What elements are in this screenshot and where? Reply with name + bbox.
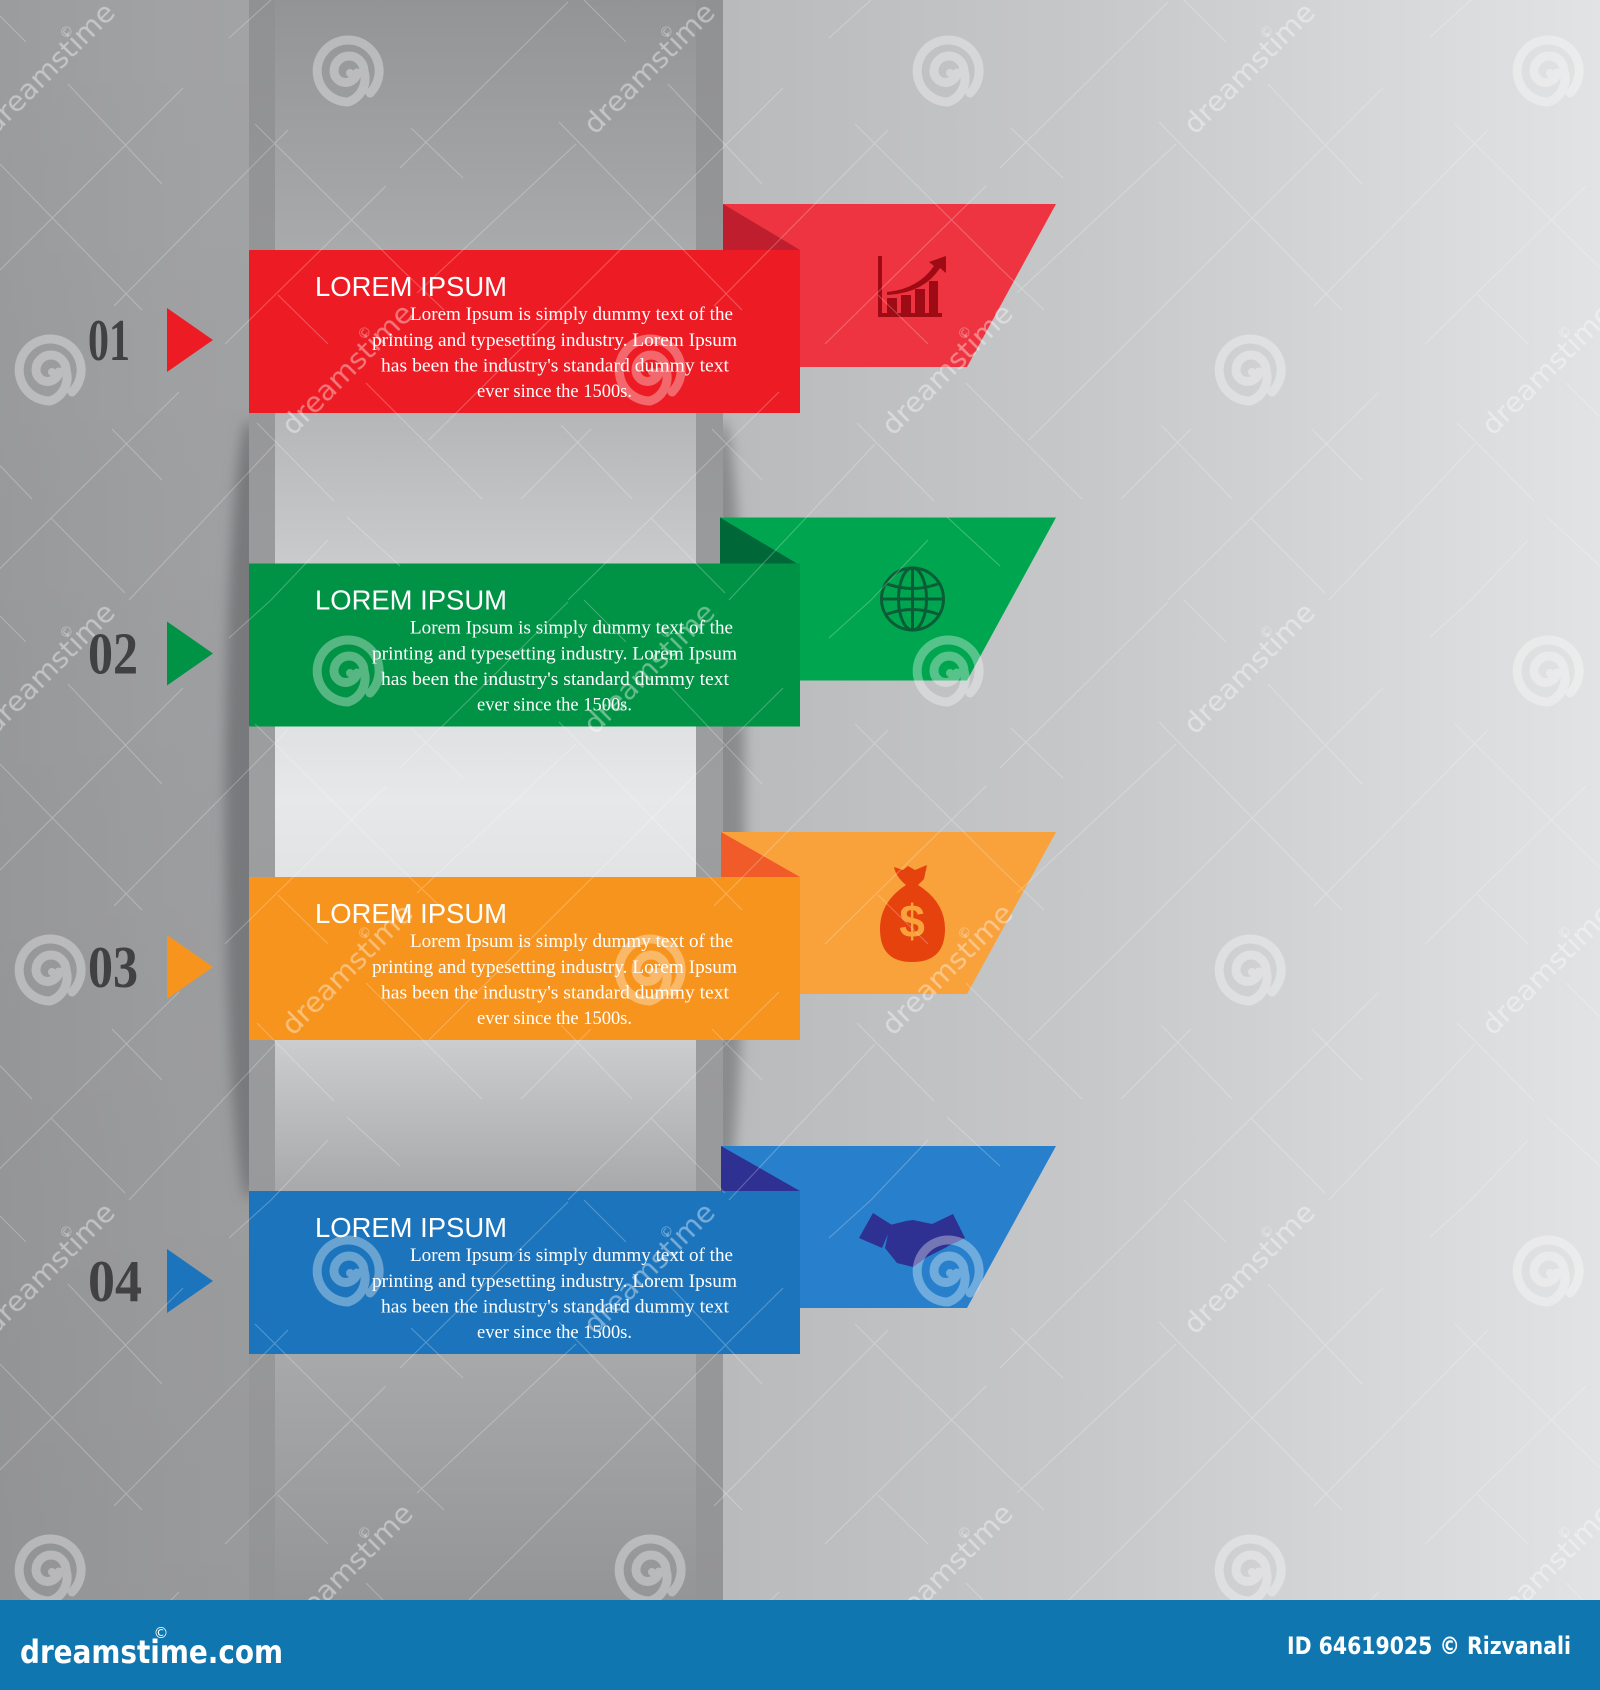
heading: step 04: LOREM IPSUM bbox=[315, 1212, 507, 1243]
text: step 01: Lorem Ipsum is simply dummy text of the bbox=[410, 304, 733, 325]
footer bar bbox=[0, 1600, 1600, 1690]
number 04: 04 bbox=[88, 1248, 142, 1314]
panel: right background bbox=[723, 0, 1600, 1600]
watermark overlay: dreamstime bbox=[1176, 0, 1321, 140]
watermark overlay: dreamstime bbox=[576, 595, 721, 740]
arrow: step 01 bbox=[167, 308, 213, 372]
watermark overlay: dreamstime bbox=[274, 1496, 419, 1641]
text: step 02: printing and typesetting industry. Lorem Ipsum bbox=[372, 644, 737, 664]
watermark overlay: © bbox=[954, 923, 976, 944]
panel: step 01 bbox=[88, 204, 1056, 413]
text: step 01 bbox=[372, 304, 737, 402]
watermark overlay: © bbox=[656, 22, 678, 43]
watermark overlay: dreamstime bbox=[1176, 1195, 1321, 1340]
panel: step 04 bbox=[88, 1146, 1056, 1354]
watermark overlay: © bbox=[354, 323, 376, 344]
watermark overlay: dreamstime bbox=[576, 1195, 721, 1340]
text: step 02: ever since the 1500s. bbox=[477, 694, 632, 716]
watermark overlay: © bbox=[1256, 622, 1278, 643]
footer logo: © bbox=[154, 1624, 168, 1642]
text: step 02: has been the industry's standard dummy text bbox=[381, 669, 730, 690]
ribbon: step 02 bbox=[249, 564, 800, 726]
flag: step 04 bbox=[721, 1146, 1056, 1308]
watermark overlay: © bbox=[354, 1523, 376, 1544]
heading: step 03: LOREM IPSUM bbox=[315, 898, 507, 929]
text: step 03: has been the industry's standard dummy text bbox=[381, 982, 730, 1004]
panel: center column bbox=[249, 0, 723, 1600]
flag: step 03 bbox=[721, 832, 1056, 994]
number 01: 01 bbox=[88, 307, 130, 373]
icon: rising chart bbox=[878, 256, 946, 317]
fold: step 03 bbox=[721, 832, 800, 877]
ribbon: step 04 bbox=[249, 1191, 800, 1354]
watermark overlay: © bbox=[656, 622, 678, 643]
panel: left background bbox=[0, 0, 249, 1600]
text: step 01: printing and typesetting industry. Lorem Ipsum bbox=[372, 330, 737, 351]
text: step 04: ever since the 1500s. bbox=[477, 1322, 632, 1343]
text: step 01: ever since the 1500s. bbox=[477, 381, 632, 402]
fold: step 04 bbox=[721, 1146, 800, 1191]
text: step 02 bbox=[372, 618, 737, 716]
watermark overlay: © bbox=[1256, 22, 1278, 43]
flag: step 01 bbox=[723, 204, 1056, 367]
watermark overlay: dreamstime bbox=[874, 296, 1019, 441]
icon: money bag: $ bbox=[899, 895, 925, 947]
text: step 01: has been the industry's standard dummy text bbox=[381, 356, 730, 376]
flag: step 02 bbox=[720, 518, 1056, 680]
ribbon: step 01 bbox=[249, 250, 800, 413]
text: step 03: printing and typesetting industry. Lorem Ipsum bbox=[372, 957, 737, 978]
watermark overlay: dreamstime bbox=[274, 896, 419, 1041]
footer logo: dreamstime.com bbox=[20, 1633, 283, 1671]
fold: step 02 bbox=[720, 518, 797, 564]
text: step 04: printing and typesetting industry. Lorem Ipsum bbox=[372, 1271, 737, 1292]
panel: step 03 bbox=[88, 832, 1056, 1040]
watermark overlay: © bbox=[954, 323, 976, 344]
panel: step 02 bbox=[88, 518, 1056, 726]
fold: step 01 bbox=[723, 204, 800, 250]
arrow: step 03 bbox=[167, 935, 213, 999]
watermark overlay: © bbox=[56, 1222, 78, 1243]
right fold shadow bbox=[723, 420, 750, 1146]
arrow: step 04 bbox=[167, 1249, 213, 1313]
watermark overlay: dreamstime bbox=[576, 0, 721, 140]
text: step 03: ever since the 1500s. bbox=[477, 1008, 632, 1029]
text: step 04: has been the industry's standard dummy text bbox=[381, 1296, 730, 1318]
arrow: step 02 bbox=[167, 622, 213, 686]
watermark overlay: dreamstime bbox=[1176, 595, 1321, 740]
watermark overlay: © bbox=[954, 1523, 976, 1544]
watermark overlay: © bbox=[56, 22, 78, 43]
ribbon: step 03 bbox=[249, 877, 800, 1040]
watermark overlay: dreamstime bbox=[874, 1496, 1019, 1641]
icon: handshake bbox=[859, 1213, 965, 1267]
icon: money bag bbox=[880, 865, 945, 962]
watermark overlay: dreamstime bbox=[274, 296, 419, 441]
watermark overlay: © bbox=[1554, 1523, 1576, 1544]
text: step 02: Lorem Ipsum is simply dummy text of the bbox=[410, 618, 733, 638]
left fold shadow bbox=[220, 420, 249, 1200]
icon: globe bbox=[882, 568, 944, 630]
watermark overlay: © bbox=[56, 622, 78, 643]
watermark overlay: © bbox=[1554, 923, 1576, 944]
heading: step 02: LOREM IPSUM bbox=[315, 584, 507, 616]
watermark overlay: © bbox=[1554, 323, 1576, 344]
number 02: 02 bbox=[88, 620, 138, 686]
watermark overlay: dreamstime bbox=[874, 896, 1019, 1041]
text: step 04: Lorem Ipsum is simply dummy text of the bbox=[410, 1245, 733, 1266]
text: step 04 bbox=[372, 1245, 737, 1343]
text: step 03 bbox=[372, 931, 737, 1029]
heading: step 01: LOREM IPSUM bbox=[315, 271, 507, 302]
watermark overlay: © bbox=[354, 923, 376, 944]
text: step 03: Lorem Ipsum is simply dummy text of the bbox=[410, 931, 733, 952]
watermark overlay: © bbox=[1256, 1222, 1278, 1243]
watermark overlay: © bbox=[656, 1222, 678, 1243]
number 03: 03 bbox=[88, 934, 138, 1000]
